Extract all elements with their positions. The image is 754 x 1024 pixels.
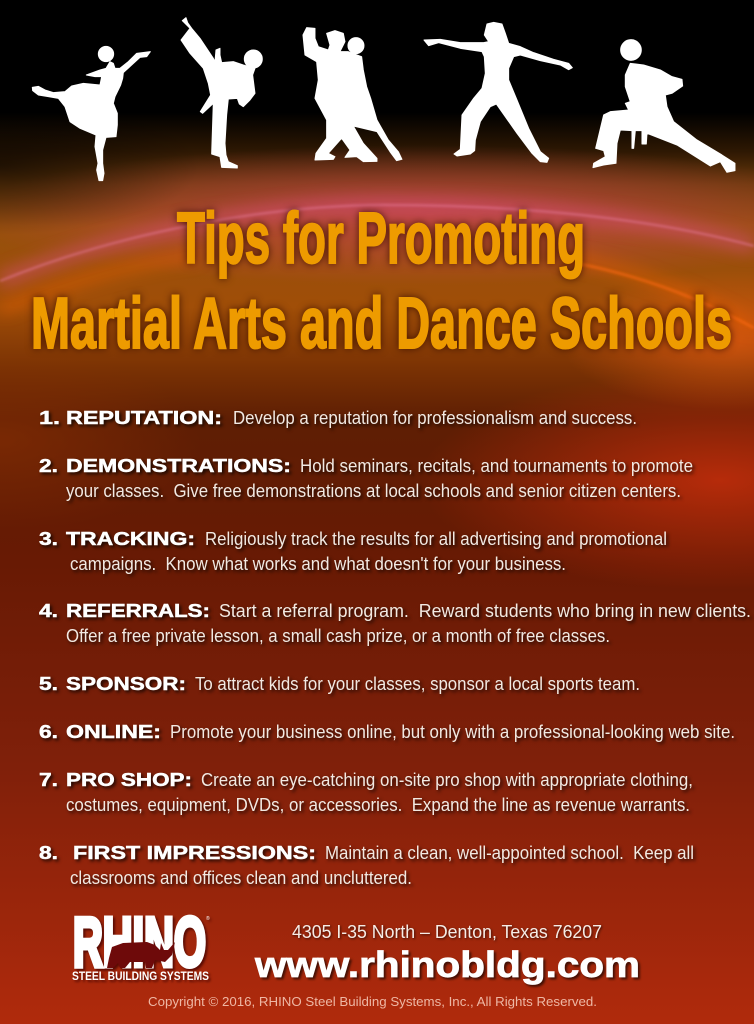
website url: www.rhinobldg.com: [254, 944, 640, 985]
icon: karate stance: [593, 40, 735, 172]
tip 7: pro shop: 7.: [39, 770, 58, 790]
tip 1: reputation: Develop a reputation for professionalism and success.: [233, 408, 637, 428]
logo: RHINO Steel Building Systems: RHINO: [73, 903, 206, 981]
icon: ballroom couple: [303, 28, 402, 162]
tip 4: referrals: Offer a free private lesson, a small cash prize, or a month of free classes.: [66, 626, 610, 646]
tip 2: demonstrations: 2.: [39, 456, 58, 476]
tip 8: first impressions: [39, 843, 694, 888]
tip 2: demonstrations: your classes. Give free demonstrations at local schools and senior citizen centers.: [66, 481, 681, 501]
tip 5: sponsor: To attract kids for your classes, sponsor a local sports team.: [195, 674, 640, 694]
tip 8: first impressions: FIRST IMPRESSIONS:: [73, 843, 316, 863]
tip 8: first impressions: classrooms and offices clean and uncluttered.: [70, 868, 412, 888]
tip 3: tracking: TRACKING:: [66, 529, 195, 549]
logo: RHINO Steel Building Systems: STEEL BUILDING SYSTEMS: [72, 971, 209, 983]
tip 3: tracking: Religiously track the results for all advertising and promotional: [205, 529, 667, 549]
tip 2: demonstrations: DEMONSTRATIONS:: [66, 456, 291, 476]
icon: rhinoceros: [107, 942, 175, 968]
tip 4: referrals: Start a referral program. Reward students who bring in new clients.: [219, 601, 751, 621]
tip 2: demonstrations: Hold seminars, recitals, and tournaments to promote: [300, 456, 693, 476]
tip 7: pro shop: Create an eye-catching on-site pro shop with appropriate clothing,: [201, 770, 693, 790]
tip 8: first impressions: Maintain a clean, well-appointed school. Keep all: [325, 843, 694, 863]
tip 2: demonstrations: [39, 456, 693, 501]
silhouettes of dancers and martial artists: [32, 18, 735, 181]
tip 1: reputation: REPUTATION:: [66, 408, 222, 428]
tip 3: tracking: campaigns. Know what works and what doesn't for your business.: [70, 554, 566, 574]
tip 8: first impressions: 8.: [39, 843, 58, 863]
title: [31, 199, 732, 364]
address: 4305 I-35 North – Denton, Texas 76207: [292, 922, 602, 942]
tips list: [39, 408, 751, 888]
logo: RHINO Steel Building Systems: [72, 903, 210, 983]
tip 3: tracking: 3.: [39, 529, 58, 549]
tip 3: tracking: [39, 529, 667, 574]
tip 7: pro shop: costumes, equipment, DVDs, or accessories. Expand the line as revenue warrants.: [66, 795, 690, 815]
tip 1: reputation: 1.: [39, 408, 60, 428]
tip 6: online: 6.: [39, 722, 58, 742]
tip 7: pro shop: [39, 770, 693, 815]
tip 6: online: ONLINE:: [66, 722, 161, 742]
tip 5: sponsor: SPONSOR:: [66, 674, 186, 694]
tip 1: reputation: [39, 408, 637, 428]
tip 4: referrals: [39, 601, 751, 646]
logo: RHINO Steel Building Systems: ®: [206, 915, 210, 922]
tip 4: referrals: 4.: [39, 601, 58, 621]
icon: modern dancer with arms spread: [424, 22, 572, 162]
icon: high-kick martial artist: [181, 18, 262, 168]
tip 4: referrals: REFERRALS:: [66, 601, 210, 621]
tip 7: pro shop: PRO SHOP:: [66, 770, 192, 790]
copyright: Copyright © 2016, RHINO Steel Building Systems, Inc., All Rights Reserved.: [148, 994, 597, 1009]
tip 5: sponsor: 5.: [39, 674, 58, 694]
icon: ballerina: [32, 46, 150, 181]
